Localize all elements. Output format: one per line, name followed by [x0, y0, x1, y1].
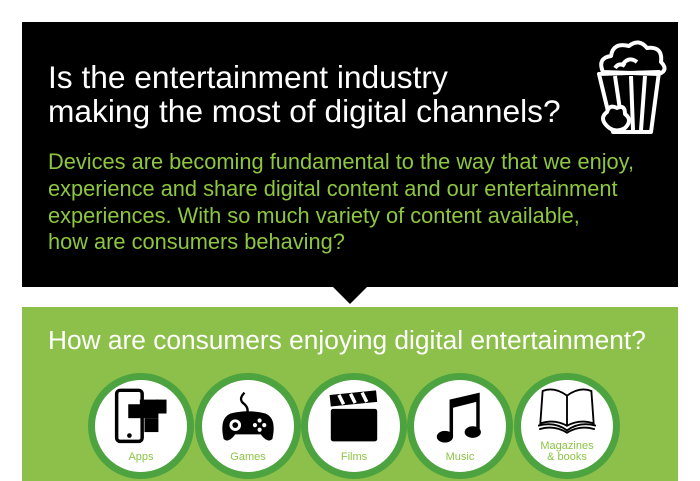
icon: films: Films [341, 451, 367, 463]
title [48, 59, 561, 129]
icon: magazines: Magazines [540, 440, 594, 452]
panel: header [22, 22, 678, 287]
heading: How are consumers enjoying digital entertainment? [48, 325, 646, 355]
icon: music: Music [446, 451, 474, 463]
icon: apps [88, 373, 194, 479]
intro text [48, 149, 634, 254]
intro text: experience and share digital content and our entertainment [48, 176, 618, 201]
arrow: notch [332, 286, 368, 304]
icon: games [195, 373, 301, 479]
icon: magazines [514, 373, 620, 479]
icon: apps: Apps [128, 451, 154, 463]
title: Is the entertainment industry [48, 59, 448, 95]
intro text: Devices are becoming fundamental to the way that we enjoy, [48, 149, 634, 174]
panel: consumers [22, 307, 678, 481]
icon: popcorn [596, 40, 667, 134]
intro text: experiences. With so much variety of content available, [48, 203, 580, 228]
icon: games: Games [230, 451, 266, 463]
icon: music [407, 373, 513, 479]
title: making the most of digital channels? [48, 93, 561, 129]
icon: magazines: & books [547, 451, 587, 463]
intro text: how are consumers behaving? [48, 229, 345, 254]
icon: films [301, 373, 407, 479]
